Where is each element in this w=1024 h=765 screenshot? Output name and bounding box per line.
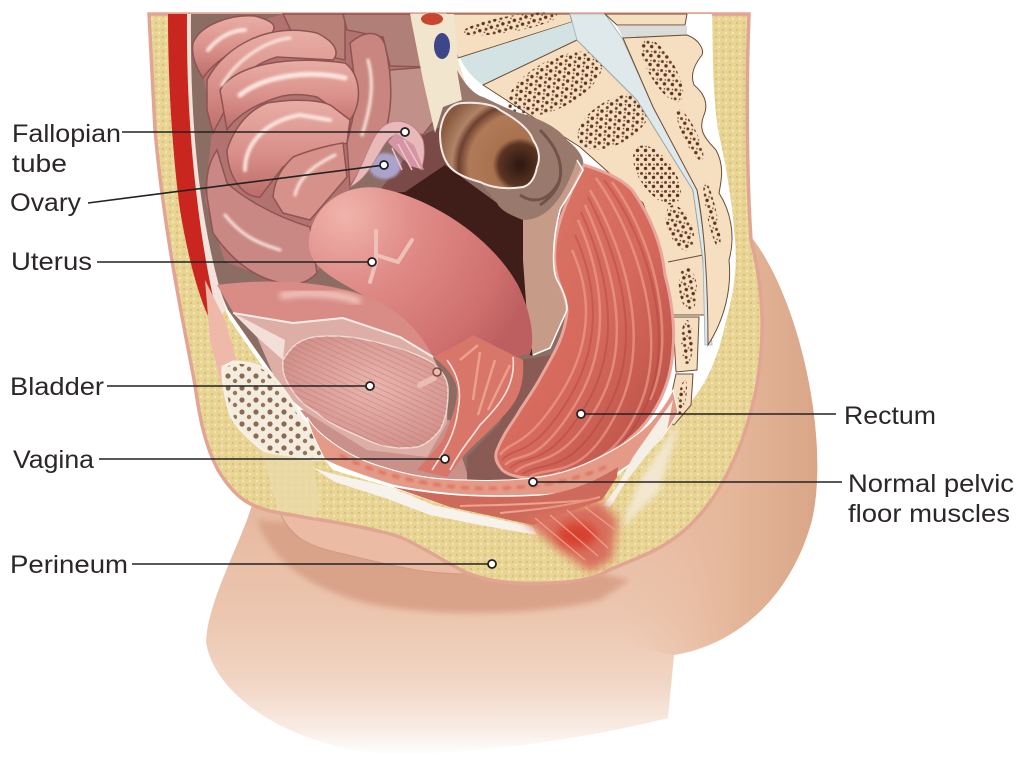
- anal sphincter: [522, 500, 618, 572]
- label: normal pelvic floor muscles: [848, 470, 1014, 528]
- fallopian tube and ovary: [350, 121, 424, 187]
- label: bladder: Bladder: [10, 373, 104, 401]
- pubic tendon: [262, 452, 320, 518]
- bladder: [283, 336, 448, 448]
- gap between rectum and vagina: [467, 355, 552, 482]
- spinal canal: [570, 14, 712, 345]
- uterus: [309, 187, 532, 357]
- label: fallopian tube: tube: [12, 150, 67, 178]
- vagina: [417, 335, 523, 477]
- spinous processes: [605, 14, 732, 345]
- peritoneum over bladder: [217, 282, 448, 457]
- colon: lumen: [440, 103, 539, 188]
- intestine highlights: [208, 30, 371, 250]
- blood vessel: aorta: [168, 14, 237, 410]
- external muscle layer: [393, 467, 618, 525]
- white fascia: [313, 400, 680, 535]
- intestines: [193, 14, 437, 284]
- label: fallopian tube: Fallopian: [12, 120, 121, 148]
- spine: vertebrae and sacrum: [447, 8, 706, 425]
- colon: outer tube: [440, 70, 583, 221]
- label: normal pelvic floor muscles: Normal pelvic: [848, 470, 1014, 498]
- rectal wall flap: [523, 160, 583, 355]
- pubic bone: [223, 362, 337, 459]
- callout dots: [366, 128, 585, 568]
- callout lines: [88, 132, 842, 564]
- rectum muscle: [496, 160, 674, 478]
- skin: lower body: [206, 238, 817, 755]
- body wall: fat layer: [149, 14, 762, 583]
- blood vessels at top: [410, 13, 470, 133]
- abdominal cavity: [188, 14, 736, 507]
- label: fallopian tube: [12, 120, 121, 178]
- pelvic floor muscles: [307, 390, 678, 496]
- label: ovary: Ovary: [10, 189, 82, 217]
- label: uterus: Uterus: [11, 248, 92, 276]
- label: rectum: Rectum: [844, 402, 936, 430]
- label: vagina: Vagina: [13, 446, 94, 474]
- label: perineum: Perineum: [10, 551, 128, 579]
- label: normal pelvic floor muscles: floor muscles: [848, 500, 1010, 528]
